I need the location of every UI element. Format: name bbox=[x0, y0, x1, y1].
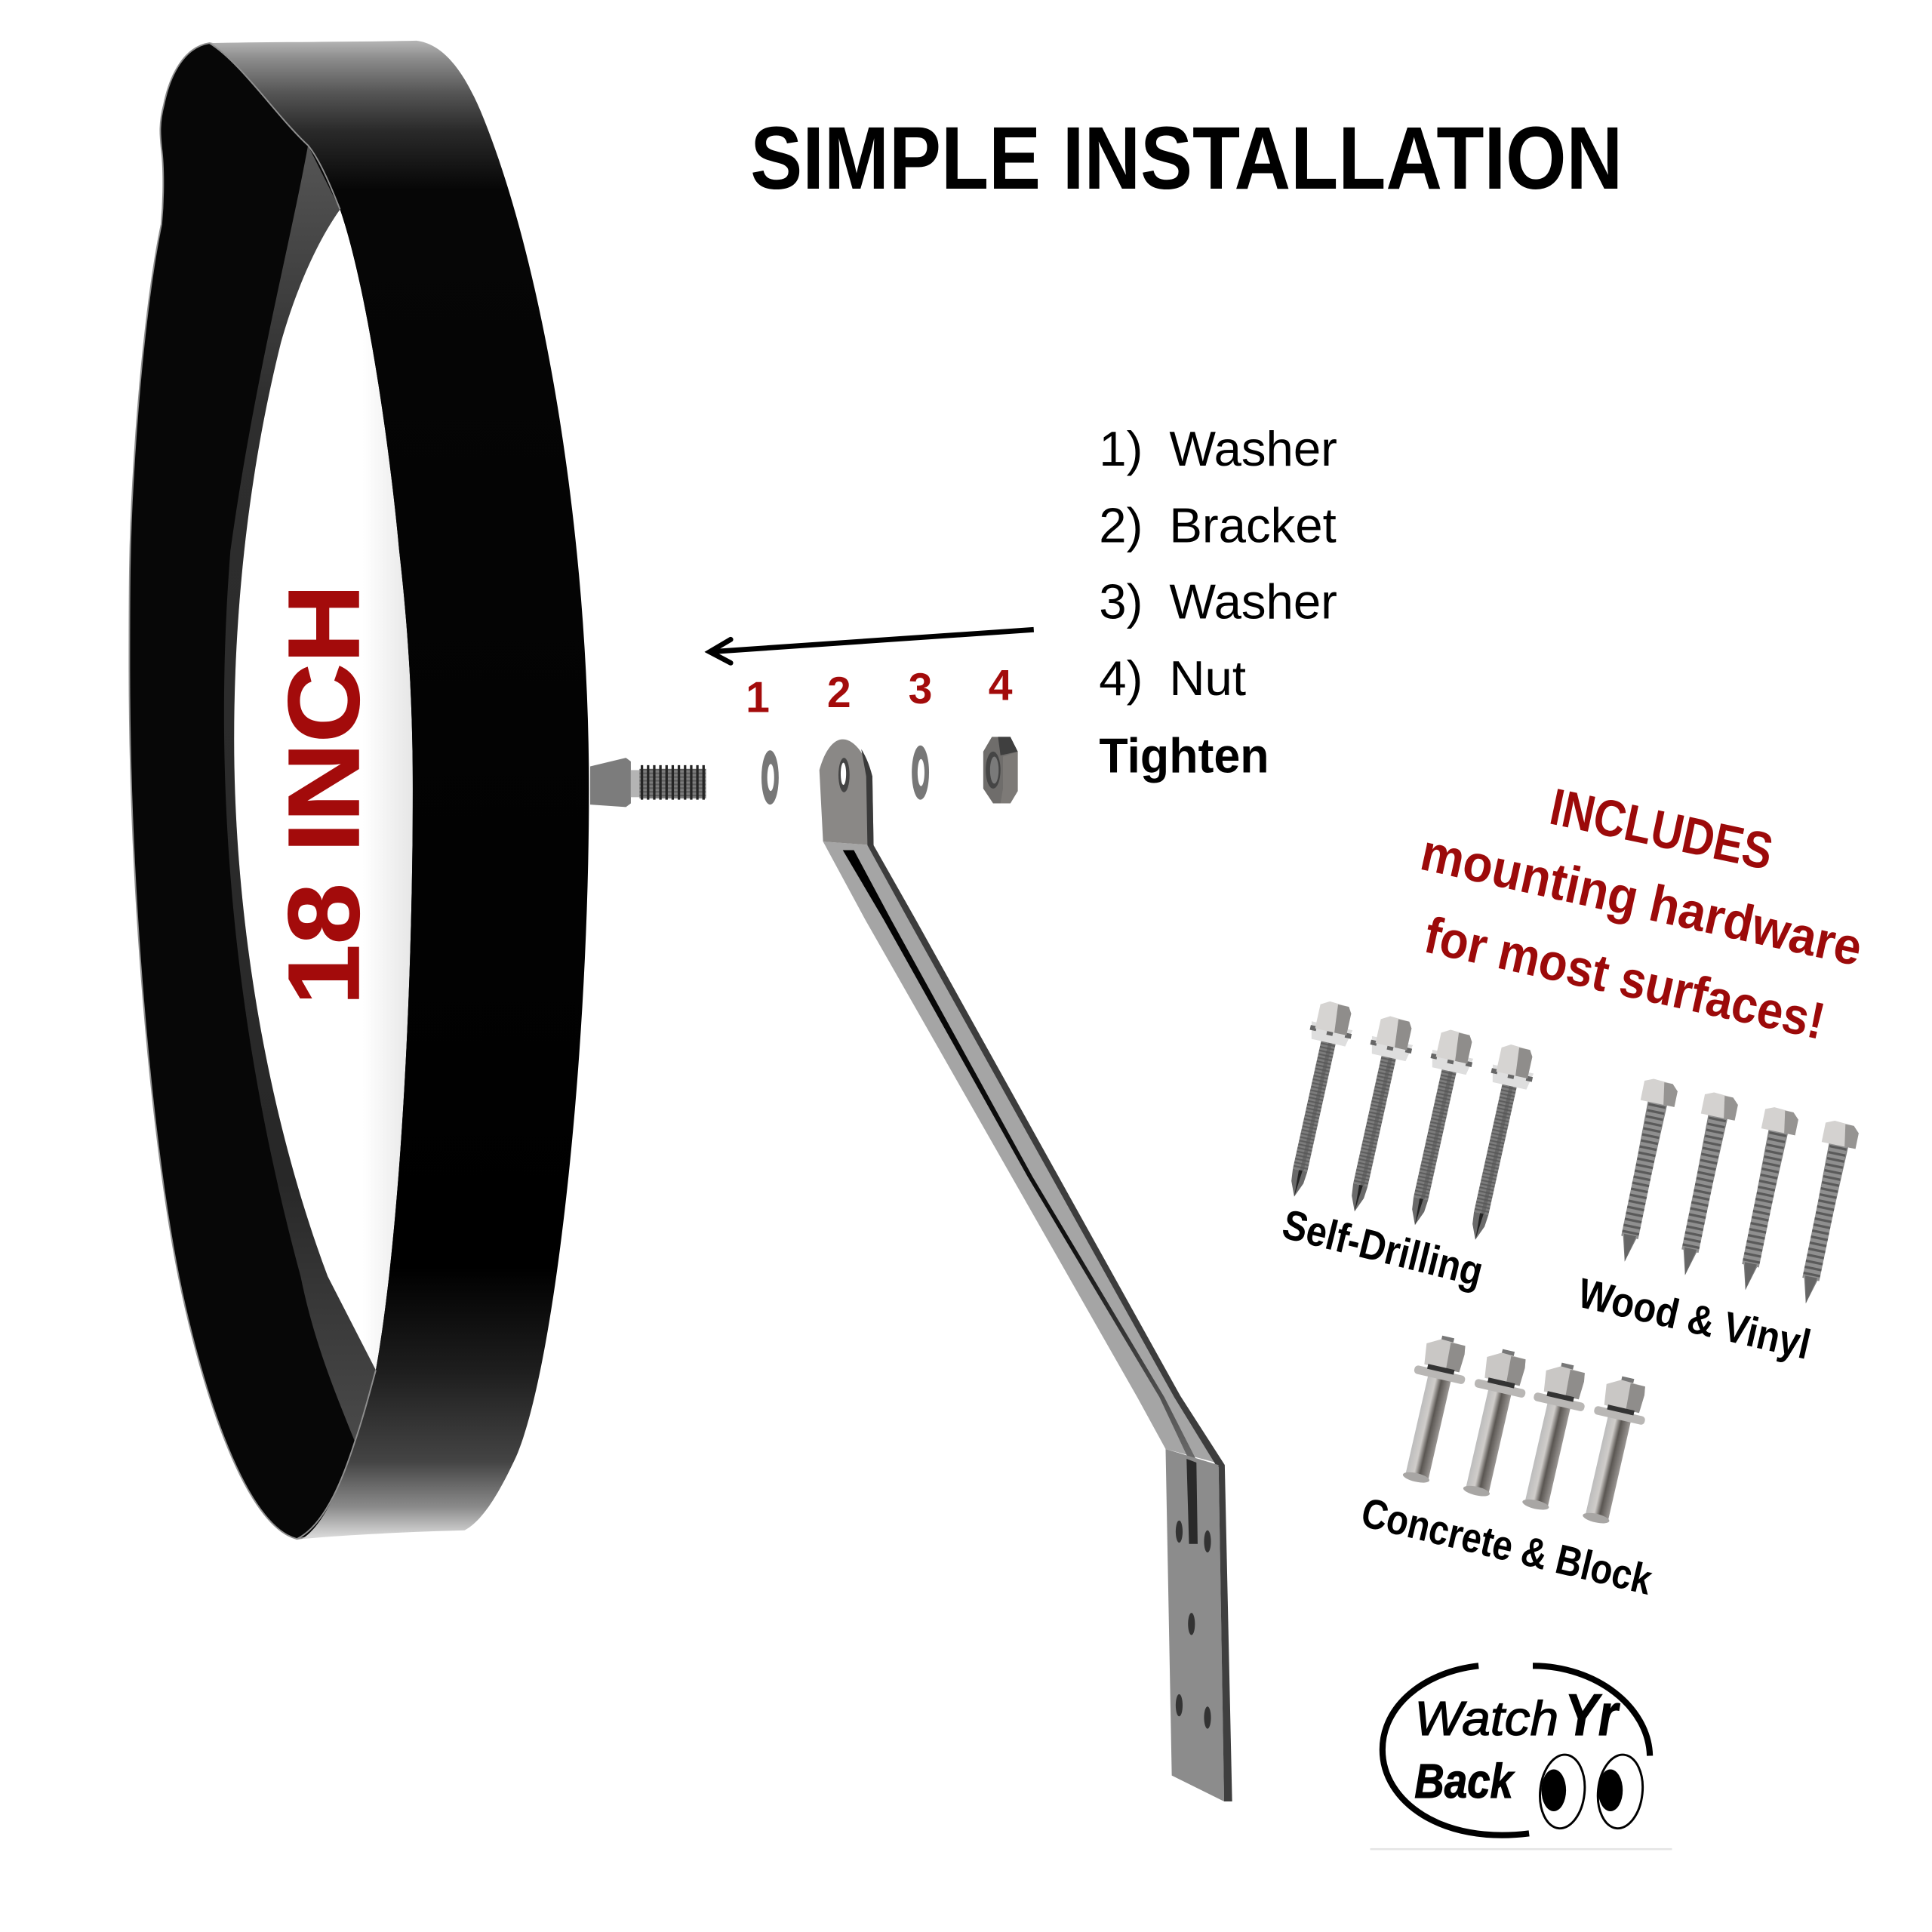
mounting bolt bbox=[590, 758, 706, 807]
mirror face bbox=[234, 210, 413, 1371]
assembly steps: 2) bbox=[1099, 497, 1143, 552]
assembly steps: 1) bbox=[1099, 421, 1143, 476]
bracket arm bbox=[823, 841, 1225, 1465]
logo text bbox=[1414, 1681, 1620, 1808]
assembly steps: Nut bbox=[1169, 651, 1246, 706]
wall plate slot bbox=[1186, 1459, 1198, 1544]
includes callout: for most surfaces! bbox=[1420, 906, 1830, 1051]
bracket bbox=[820, 740, 1232, 1801]
assembly steps: 4) bbox=[1099, 651, 1143, 706]
assembly steps: Washer bbox=[1169, 421, 1337, 476]
bracket head hole bbox=[838, 758, 850, 792]
assembly steps: 3) bbox=[1099, 574, 1143, 629]
part numbers: 3 bbox=[909, 665, 932, 713]
label: wood and vinyl: Wood & Vinyl bbox=[1574, 1269, 1815, 1368]
ring inner back surface bbox=[129, 43, 419, 1539]
nut bbox=[983, 737, 1018, 803]
label: concrete and block: Concrete & Block bbox=[1357, 1489, 1657, 1604]
bracket arm dark edge bbox=[867, 845, 1225, 1467]
bracket wall plate bbox=[1165, 1449, 1224, 1801]
assembly steps bbox=[1099, 421, 1337, 783]
bolt cylinder bbox=[590, 758, 631, 807]
ring edge highlights bbox=[210, 43, 376, 1539]
logo bbox=[1371, 1666, 1672, 1850]
logo eyes bbox=[1537, 1752, 1646, 1831]
part numbers bbox=[746, 661, 1013, 722]
ring front band bbox=[210, 41, 589, 1539]
wall plate edge bbox=[1219, 1465, 1232, 1801]
logo text: Yr bbox=[1564, 1681, 1620, 1748]
washer 3 bbox=[912, 746, 929, 800]
arrow bbox=[709, 629, 1034, 663]
bracket arm groove bbox=[843, 851, 1196, 1460]
assembly steps: Tighten bbox=[1099, 728, 1269, 783]
self-drilling screws bbox=[1274, 998, 1539, 1244]
mirror ring bbox=[129, 41, 589, 1539]
concrete anchors bbox=[1390, 1331, 1654, 1528]
bolt thread bbox=[639, 769, 706, 798]
logo text: Back bbox=[1414, 1755, 1515, 1808]
includes callout: mounting hardware bbox=[1416, 823, 1867, 977]
part numbers: 1 bbox=[746, 674, 770, 722]
wall plate holes bbox=[1176, 1521, 1211, 1729]
part numbers: 2 bbox=[827, 669, 851, 717]
assembly steps: Bracket bbox=[1169, 497, 1337, 552]
size label: 18 INCH bbox=[268, 584, 380, 1005]
title: SIMPLE INSTALLATION bbox=[750, 109, 1623, 208]
logo text: Watch bbox=[1414, 1692, 1558, 1746]
wood and vinyl screws bbox=[1607, 1077, 1860, 1307]
label: self-drilling: Self-Drilling bbox=[1278, 1201, 1487, 1295]
part numbers: 4 bbox=[989, 661, 1013, 709]
washer 1 bbox=[761, 750, 779, 804]
bolt neck bbox=[631, 770, 642, 797]
ring inner lip strip bbox=[224, 146, 376, 1441]
bracket head plate bbox=[820, 740, 874, 845]
assembly steps: Washer bbox=[1169, 574, 1337, 629]
logo oval arcs bbox=[1383, 1666, 1650, 1835]
includes callout bbox=[1416, 777, 1867, 1051]
includes callout: INCLUDES bbox=[1545, 777, 1778, 881]
